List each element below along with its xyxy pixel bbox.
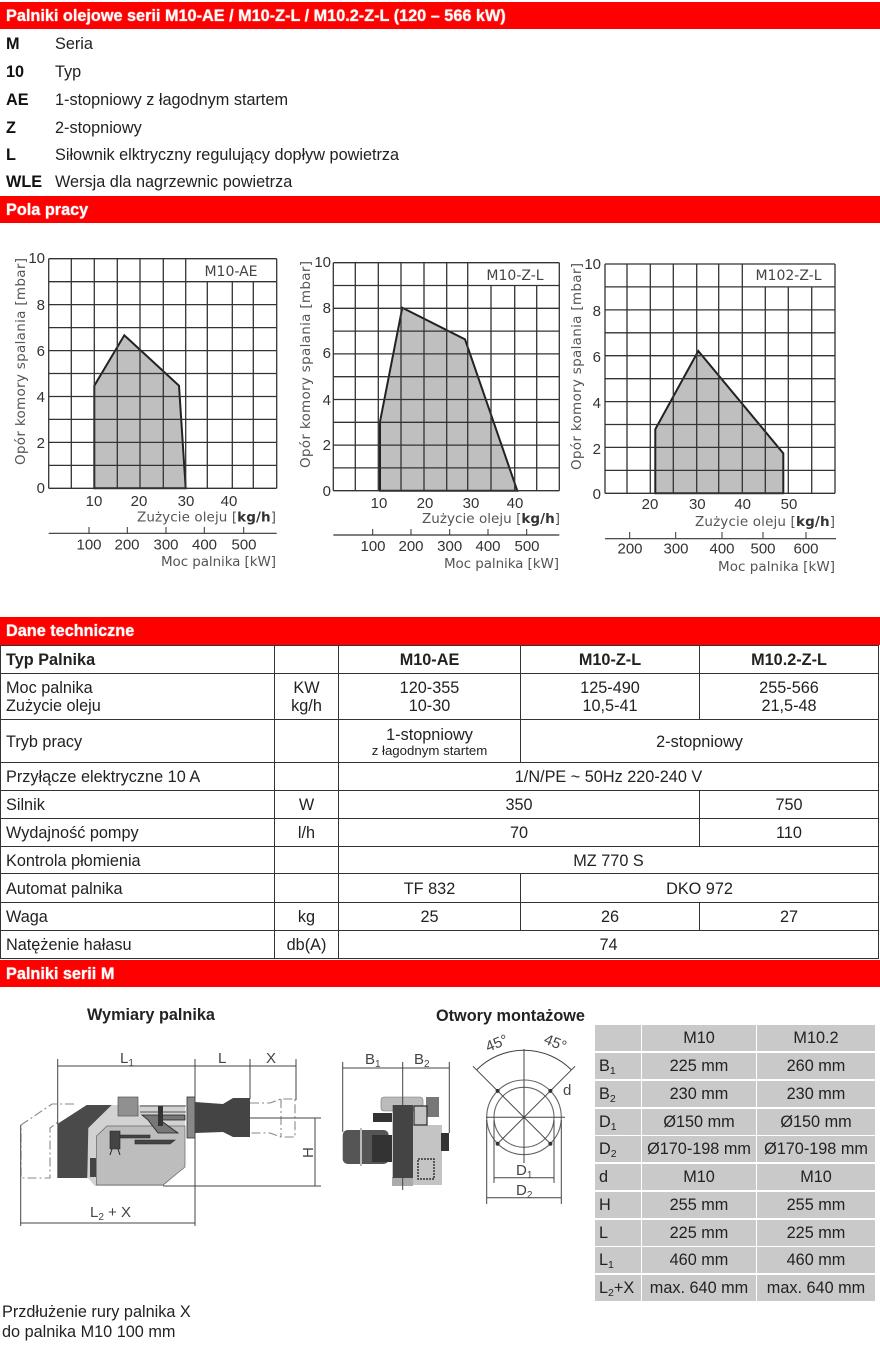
B dimension labels bbox=[365, 1051, 430, 1070]
legend row Z: Z bbox=[6, 119, 16, 137]
power scale: 500 bbox=[750, 540, 776, 558]
row: burner type: M10-AE bbox=[400, 651, 459, 669]
dimension labels: 45° bbox=[542, 1031, 569, 1055]
row B2: 230 mm bbox=[670, 1085, 728, 1103]
legend: model code key bbox=[6, 35, 400, 191]
row D1: Ø150 mm bbox=[663, 1113, 735, 1131]
power scale bbox=[49, 527, 277, 554]
row: pump output bbox=[6, 824, 802, 842]
column headers bbox=[595, 1025, 875, 1051]
chart tag: M10-Z-L bbox=[486, 268, 544, 284]
row H: 255 mm bbox=[670, 1196, 728, 1214]
dimension lines bbox=[21, 1059, 321, 1226]
power title: Moc palnika [kW] bbox=[718, 559, 835, 575]
row D2 bbox=[595, 1136, 875, 1162]
note: tube extension bbox=[2, 1303, 191, 1341]
y axis numbers: 0 bbox=[37, 480, 45, 497]
row: motor: Silnik bbox=[6, 796, 45, 814]
row: burner type bbox=[6, 651, 827, 954]
row: burner controller bbox=[6, 880, 733, 898]
legend row M bbox=[6, 35, 93, 53]
y axis title: Opór komory spalania [mbar] bbox=[13, 258, 29, 465]
table: technical data bbox=[0, 645, 879, 959]
row: burner controller: DKO 972 bbox=[666, 880, 733, 898]
row L1 bbox=[595, 1247, 875, 1273]
y axis numbers: 4 bbox=[323, 392, 331, 409]
note: tube extension: do palnika M10 100 mm bbox=[2, 1323, 175, 1341]
row: burner type: M10.2-Z-L bbox=[751, 651, 827, 669]
B dimension labels: 2 bbox=[424, 1059, 430, 1070]
flange circles bbox=[487, 1080, 561, 1155]
row: burner type: Typ Palnika bbox=[6, 651, 95, 669]
row: pump output: l/h bbox=[298, 824, 315, 842]
y axis numbers: 6 bbox=[593, 349, 601, 366]
power scale: 300 bbox=[663, 540, 689, 558]
power scale: 200 bbox=[114, 536, 140, 554]
dimension labels: H bbox=[300, 1147, 317, 1158]
row D2: D2 bbox=[599, 1140, 617, 1160]
row: noise: Natężenie hałasu bbox=[6, 936, 132, 954]
oil consumption scale bbox=[371, 495, 523, 512]
row D2: Ø170-198 mm bbox=[647, 1140, 751, 1158]
row: electrical connection: Przyłącze elektryczne 10 A bbox=[6, 768, 200, 786]
header: product title bbox=[0, 2, 880, 29]
oil consumption scale: 30 bbox=[463, 495, 479, 512]
y axis numbers: 8 bbox=[37, 297, 45, 314]
row: electrical connection: 1/N/PE ~ 50Hz 220-240 V bbox=[515, 768, 702, 786]
row: weight bbox=[6, 908, 798, 926]
y axis numbers: 2 bbox=[593, 441, 601, 458]
chart: M10-Z-L working field bbox=[298, 254, 560, 572]
row L1: 460 mm bbox=[787, 1251, 845, 1269]
dimension labels: 2 bbox=[527, 1190, 533, 1201]
y axis numbers: 2 bbox=[37, 435, 45, 452]
row: weight: 25 bbox=[420, 908, 439, 926]
y axis numbers: 8 bbox=[323, 300, 331, 317]
row D1 bbox=[595, 1109, 875, 1135]
chart tag: M10-AE bbox=[204, 264, 258, 280]
phantom outline of open position bbox=[21, 1099, 295, 1178]
header: product title: Palniki olejowe serii M10-AE / M10-Z-L / M10.2-Z-L (120 – 566 kW) bbox=[6, 7, 506, 25]
row: noise: 74 bbox=[599, 936, 618, 954]
power scale: 100 bbox=[360, 538, 386, 555]
y axis numbers: 10 bbox=[28, 250, 45, 267]
row d bbox=[595, 1164, 875, 1190]
row: operating mode: z łagodnym startem bbox=[372, 743, 487, 758]
dimension labels: 2 bbox=[98, 1212, 104, 1223]
row H: H bbox=[599, 1196, 611, 1214]
dimension labels: X bbox=[266, 1050, 276, 1067]
legend row AE: 1-stopniowy z łagodnym startem bbox=[55, 91, 288, 109]
legend row L: L bbox=[6, 146, 16, 164]
row: burner controller: TF 832 bbox=[404, 880, 455, 898]
oil consumption scale: 30 bbox=[178, 493, 194, 510]
oil consumption scale: 40 bbox=[221, 493, 237, 510]
row: motor: 750 bbox=[775, 796, 803, 814]
row: pump output: 70 bbox=[510, 824, 528, 842]
oil consumption scale: 20 bbox=[131, 493, 147, 510]
row: power and consumption: Zużycie oleju bbox=[6, 697, 101, 715]
row: weight: 27 bbox=[780, 908, 798, 926]
column headers: M10 bbox=[683, 1029, 715, 1047]
y axis numbers bbox=[584, 256, 601, 503]
row L1: 460 mm bbox=[670, 1251, 728, 1269]
y axis numbers: 4 bbox=[593, 395, 601, 412]
row: operating mode: Tryb pracy bbox=[6, 732, 82, 750]
header: technical data bbox=[0, 617, 880, 645]
y axis numbers: 6 bbox=[323, 345, 331, 362]
row: motor bbox=[6, 796, 803, 814]
row: power and consumption: 255-566 bbox=[759, 679, 819, 697]
row L: 225 mm bbox=[670, 1224, 728, 1242]
dimension labels: L bbox=[90, 1204, 98, 1221]
legend row 10: Typ bbox=[55, 63, 81, 81]
legend row WLE: WLE bbox=[6, 173, 42, 191]
row B1: B1 bbox=[599, 1057, 616, 1077]
power scale: 400 bbox=[709, 540, 735, 558]
power title: Moc palnika [kW] bbox=[161, 554, 276, 570]
oil consumption scale: 40 bbox=[734, 496, 751, 513]
row: burner type: M10-Z-L bbox=[579, 651, 641, 669]
header: technical data: Dane techniczne bbox=[6, 622, 134, 640]
row: motor: 350 bbox=[505, 796, 533, 814]
diameter dimension lines bbox=[487, 1120, 561, 1204]
cross lines and angle arc bbox=[473, 1049, 575, 1163]
oil consumption title: Zużycie oleju [kg/h] bbox=[137, 510, 276, 526]
power scale: 600 bbox=[793, 540, 819, 558]
row B2 bbox=[595, 1081, 875, 1107]
heading: mounting holes: Otwory montażowe bbox=[436, 1007, 585, 1025]
row L: 225 mm bbox=[787, 1224, 845, 1242]
row L bbox=[595, 1220, 875, 1246]
dimension labels: L bbox=[120, 1050, 128, 1067]
header: M series burners bbox=[0, 960, 880, 987]
y axis numbers: 0 bbox=[593, 486, 601, 503]
row: power and consumption: 120-355 bbox=[400, 679, 459, 697]
row D2: Ø170-198 mm bbox=[764, 1140, 868, 1158]
y axis numbers: 10 bbox=[314, 254, 331, 271]
oil consumption scale: 30 bbox=[689, 496, 706, 513]
power scale: 400 bbox=[475, 538, 501, 555]
power scale: 100 bbox=[76, 536, 102, 554]
row H bbox=[595, 1192, 875, 1218]
B dimension lines bbox=[343, 1062, 449, 1190]
power scale: 400 bbox=[192, 536, 217, 554]
row: electrical connection bbox=[6, 768, 702, 786]
row: noise: db(A) bbox=[287, 936, 326, 954]
row: pump output: Wydajność pompy bbox=[6, 824, 139, 842]
y axis numbers bbox=[28, 250, 45, 497]
dimension labels bbox=[90, 1050, 317, 1223]
row: weight: kg bbox=[298, 908, 315, 926]
table: dimensions bbox=[595, 1025, 875, 1301]
legend row M: M bbox=[6, 35, 20, 53]
row B1: 260 mm bbox=[787, 1057, 845, 1075]
row L1: L1 bbox=[599, 1251, 614, 1271]
y axis title: Opór komory spalania [mbar] bbox=[298, 261, 314, 468]
row L2+X: max. 640 mm bbox=[767, 1279, 865, 1297]
operating area polygon bbox=[380, 308, 517, 491]
row: power and consumption: 125-490 bbox=[580, 679, 640, 697]
dimension labels: + X bbox=[104, 1204, 131, 1221]
power scale: 300 bbox=[153, 536, 179, 554]
row d: M10 bbox=[683, 1168, 715, 1186]
burner body bbox=[57, 1097, 250, 1186]
y axis numbers: 4 bbox=[37, 389, 45, 406]
legend row 10: 10 bbox=[6, 63, 24, 81]
row: operating mode: 1-stopniowy bbox=[386, 726, 473, 744]
legend row AE: AE bbox=[6, 91, 29, 109]
row: flame control bbox=[6, 852, 644, 870]
row: power and consumption: 10-30 bbox=[409, 697, 450, 715]
B dimension labels: 1 bbox=[375, 1059, 381, 1070]
legend row 10 bbox=[6, 63, 81, 81]
dimension labels: L bbox=[218, 1050, 226, 1067]
legend row Z: 2-stopniowy bbox=[55, 119, 142, 137]
power title: Moc palnika [kW] bbox=[444, 556, 559, 572]
row L: L bbox=[599, 1224, 608, 1242]
dimension labels: D bbox=[516, 1182, 527, 1199]
row: power and consumption: Moc palnika bbox=[6, 679, 93, 697]
dimension labels: 1 bbox=[128, 1058, 134, 1069]
power scale bbox=[605, 532, 836, 558]
row d: d bbox=[599, 1168, 608, 1186]
row: power and consumption: kg/h bbox=[291, 697, 322, 715]
power scale: 500 bbox=[231, 536, 257, 554]
diagram: burner front view bbox=[342, 1051, 450, 1190]
oil consumption title: Zużycie oleju [kg/h] bbox=[422, 511, 560, 527]
y axis numbers bbox=[314, 254, 331, 500]
legend row M: Seria bbox=[55, 35, 93, 53]
power scale: 200 bbox=[398, 538, 424, 555]
diagram: burner side view with dimensions bbox=[20, 1050, 321, 1226]
row: operating mode: 2-stopniowy bbox=[656, 732, 743, 750]
operating area polygon bbox=[655, 351, 783, 493]
dimension labels: D bbox=[516, 1162, 527, 1179]
row B1 bbox=[595, 1053, 875, 1079]
oil consumption title: Zużycie oleju [kg/h] bbox=[695, 514, 835, 530]
header: working fields bbox=[0, 196, 880, 223]
y axis title: Opór komory spalania [mbar] bbox=[569, 263, 585, 470]
y axis numbers: 10 bbox=[584, 256, 601, 273]
row: motor: W bbox=[299, 796, 314, 814]
row B1: 225 mm bbox=[670, 1057, 728, 1075]
oil consumption scale: 20 bbox=[642, 496, 658, 513]
oil consumption scale bbox=[86, 493, 237, 510]
row: power and consumption: KW bbox=[293, 679, 320, 697]
power scale: 500 bbox=[514, 538, 540, 555]
power scale bbox=[333, 529, 559, 555]
row L2+X: max. 640 mm bbox=[650, 1279, 748, 1297]
row B2: B2 bbox=[599, 1085, 616, 1105]
row d: M10 bbox=[800, 1168, 832, 1186]
dimension labels: 1 bbox=[527, 1170, 533, 1181]
row: operating mode bbox=[6, 726, 743, 758]
header: M series burners: Palniki serii M bbox=[6, 965, 114, 983]
B dimension labels: B bbox=[365, 1051, 375, 1068]
header: working fields: Pola pracy bbox=[6, 201, 88, 219]
y axis numbers: 6 bbox=[37, 343, 45, 360]
oil consumption scale: 10 bbox=[371, 495, 387, 512]
y axis numbers: 2 bbox=[323, 437, 331, 454]
oil consumption scale bbox=[642, 496, 797, 513]
oil consumption scale: 50 bbox=[781, 496, 797, 513]
dimension labels: d bbox=[563, 1082, 571, 1099]
B dimension labels: B bbox=[414, 1051, 424, 1068]
row: weight: Waga bbox=[6, 908, 48, 926]
row L2+X: L2+X bbox=[599, 1279, 634, 1299]
power scale: 300 bbox=[437, 538, 462, 555]
legend row L: Siłownik elktryczny regulujący dopływ powietrza bbox=[55, 146, 399, 164]
row D1: D1 bbox=[599, 1113, 617, 1133]
diagram: mounting hole pattern bbox=[472, 1031, 576, 1204]
chart tag: M102-Z-L bbox=[755, 268, 822, 284]
row: flame control: MZ 770 S bbox=[573, 852, 644, 870]
row: power and consumption bbox=[6, 679, 819, 715]
row: burner controller: Automat palnika bbox=[6, 880, 123, 898]
chart: M10-AE working field bbox=[13, 250, 278, 570]
power scale: 200 bbox=[617, 540, 643, 558]
row: weight: 26 bbox=[601, 908, 619, 926]
chart: M102-Z-L working field bbox=[569, 256, 836, 575]
row: noise bbox=[6, 936, 618, 954]
burner front body bbox=[343, 1097, 449, 1186]
row: power and consumption: 21,5-48 bbox=[761, 697, 817, 715]
row: pump output: 110 bbox=[776, 824, 802, 842]
note: tube extension: Przdłużenie rury palnika X bbox=[2, 1303, 191, 1321]
row D1: Ø150 mm bbox=[780, 1113, 852, 1131]
heading: burner dimensions: Wymiary palnika bbox=[87, 1006, 215, 1024]
y axis numbers: 8 bbox=[593, 303, 601, 320]
row B2: 230 mm bbox=[787, 1085, 845, 1103]
row: power and consumption: 10,5-41 bbox=[582, 697, 638, 715]
oil consumption scale: 20 bbox=[417, 495, 433, 512]
legend row WLE: Wersja dla nagrzewnic powietrza bbox=[55, 173, 292, 191]
row H: 255 mm bbox=[787, 1196, 845, 1214]
row: flame control: Kontrola płomienia bbox=[6, 852, 141, 870]
oil consumption scale: 40 bbox=[507, 495, 523, 512]
y axis numbers: 0 bbox=[323, 483, 331, 500]
oil consumption scale: 10 bbox=[86, 493, 102, 510]
operating area polygon bbox=[94, 335, 186, 488]
dimension labels bbox=[483, 1031, 571, 1201]
row L2+X bbox=[595, 1275, 875, 1301]
legend row Z bbox=[6, 119, 142, 137]
column headers: M10.2 bbox=[793, 1029, 839, 1047]
dimension labels: 45° bbox=[483, 1031, 511, 1056]
bolt holes bbox=[496, 1089, 552, 1146]
